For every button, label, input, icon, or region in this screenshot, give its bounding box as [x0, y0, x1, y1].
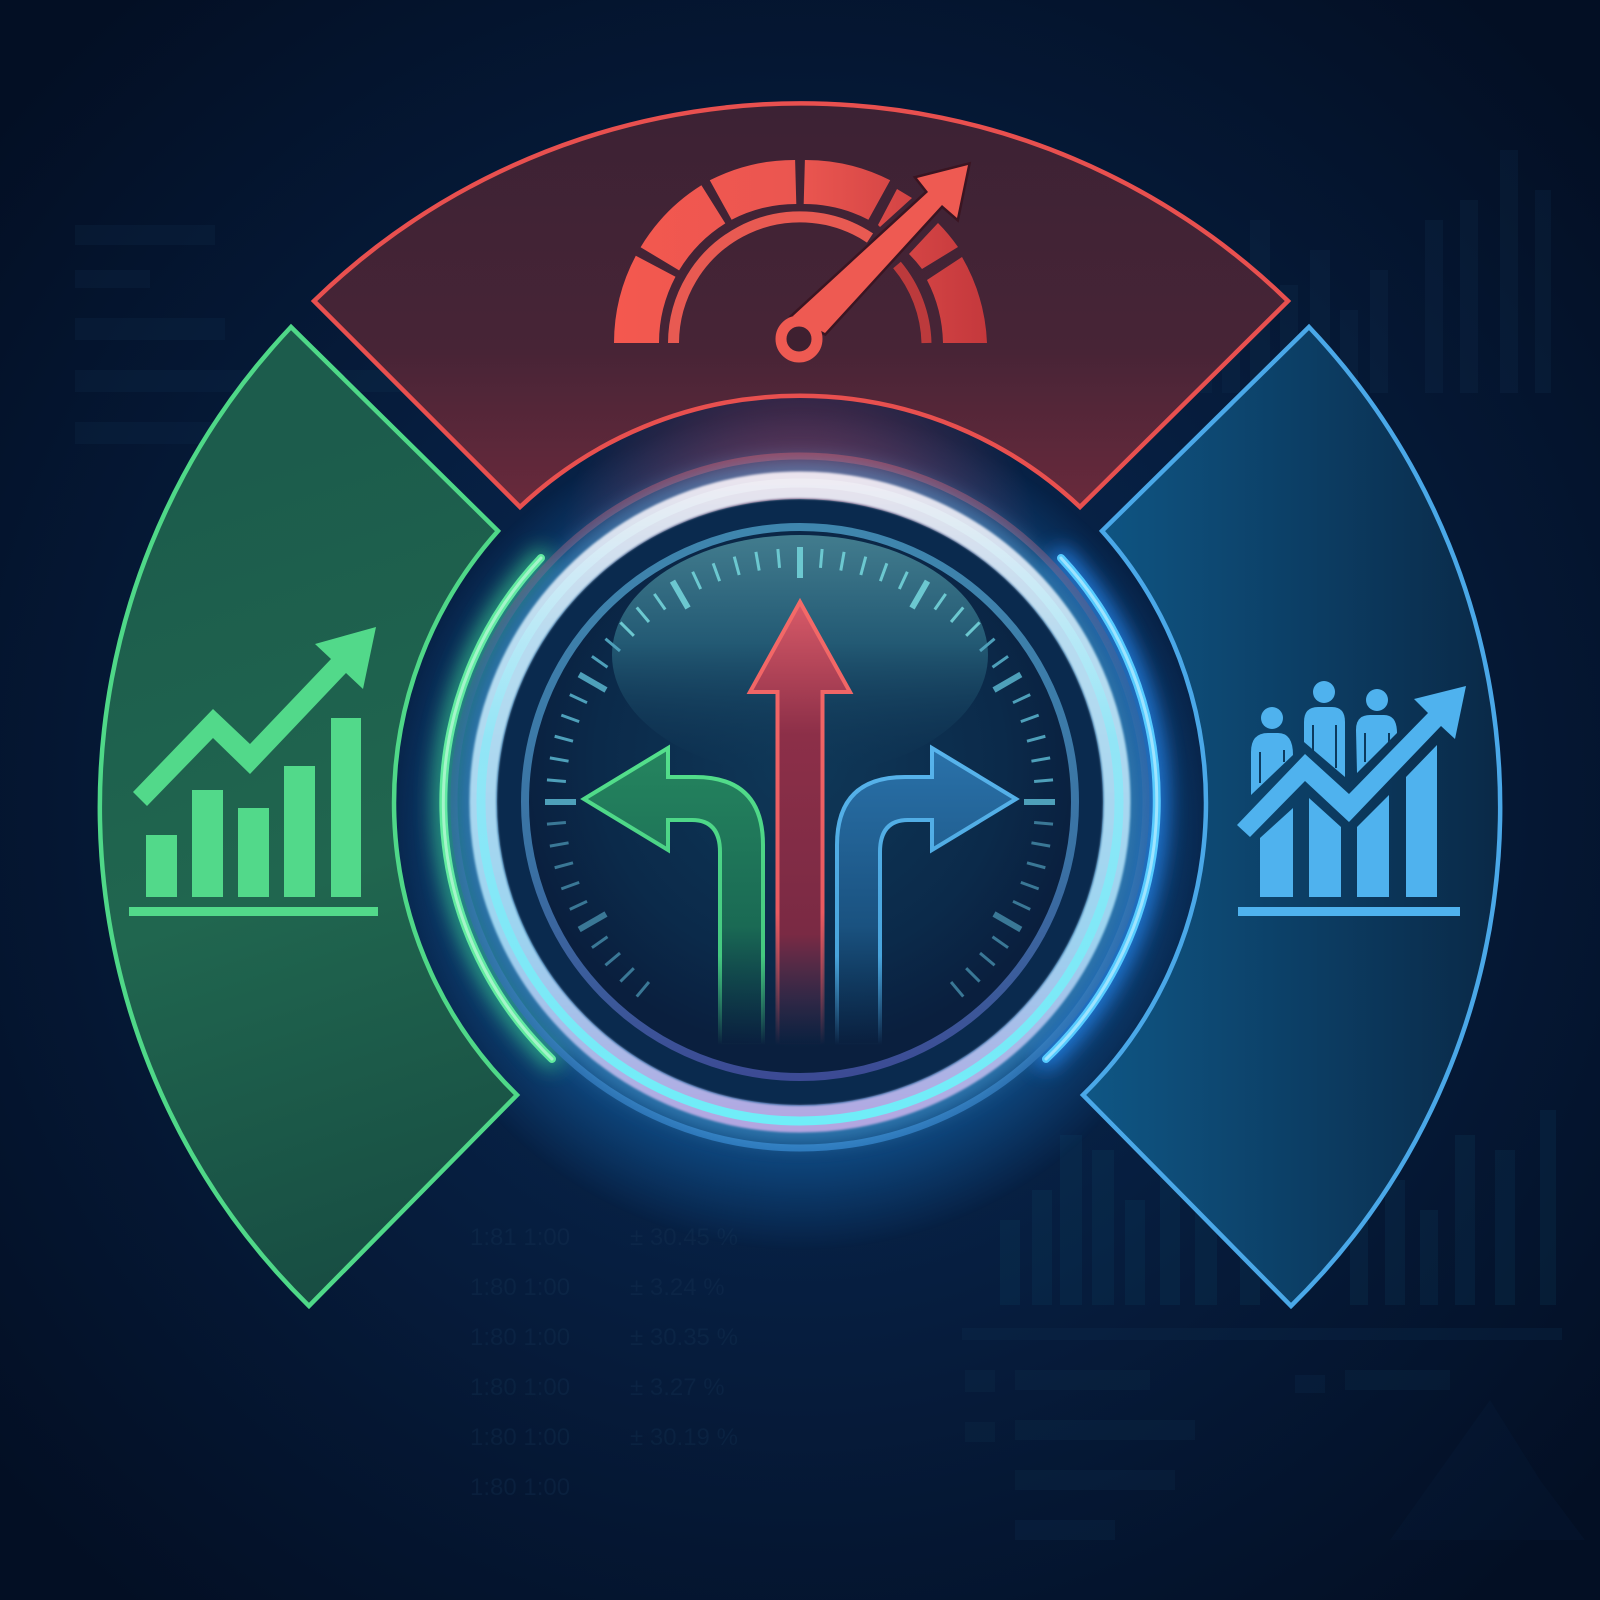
faint table text: ± 3.27 % — [630, 1374, 725, 1401]
arrow: red straight up — [750, 602, 850, 1045]
faint table text: ± 30.19 % — [630, 1424, 738, 1451]
person right — [1356, 689, 1397, 773]
faint bars top right — [1080, 150, 1551, 393]
needle — [781, 165, 968, 357]
panel: green left segment — [100, 327, 517, 1306]
cyan line in ring — [481, 483, 1119, 1121]
person middle — [1304, 681, 1345, 777]
dial highlight ellipse — [612, 535, 988, 724]
faint table text: 1:80 1:00 — [470, 1274, 570, 1301]
icon: people and growth chart — [1237, 681, 1466, 916]
faint table text: ± 3.24 % — [630, 1274, 725, 1301]
bright ring — [483, 485, 1117, 1119]
dial face — [525, 527, 1075, 1077]
faint table text: 1:80 1:00 — [470, 1424, 570, 1451]
minor and major ticks — [545, 547, 1055, 997]
central blue halo — [380, 410, 1220, 1250]
faint table text — [470, 1224, 738, 1501]
faint rows lower right — [962, 1328, 1585, 1540]
faint table text: 1:80 1:00 — [470, 1374, 570, 1401]
faint table text: ± 30.35 % — [630, 1324, 738, 1351]
ring glow — [475, 477, 1125, 1127]
icon: green growth chart — [129, 627, 378, 916]
faint table text: 1:80 1:00 — [470, 1324, 570, 1351]
red glow above dial — [560, 320, 1040, 800]
dark inner band — [497, 499, 1103, 1105]
faint bars lower right — [1000, 1110, 1556, 1305]
faint rows left — [75, 225, 465, 444]
arrow: blue turning right — [837, 748, 1016, 1045]
central dial — [454, 456, 1146, 1148]
outer faint ring — [454, 456, 1146, 1148]
arrow: green turning left — [584, 748, 763, 1045]
green glowing arc — [443, 558, 552, 1059]
icon: speedometer with arrow — [614, 160, 987, 357]
panel: blue right segment — [1083, 327, 1500, 1306]
faint table text: 1:81 1:00 — [470, 1224, 570, 1251]
blue glowing arc — [1046, 558, 1157, 1059]
faint table text: ± 30.45 % — [630, 1224, 738, 1251]
faint table text: 1:80 1:00 — [470, 1474, 570, 1501]
panel: red top segment — [314, 103, 1288, 507]
person left — [1251, 707, 1293, 795]
